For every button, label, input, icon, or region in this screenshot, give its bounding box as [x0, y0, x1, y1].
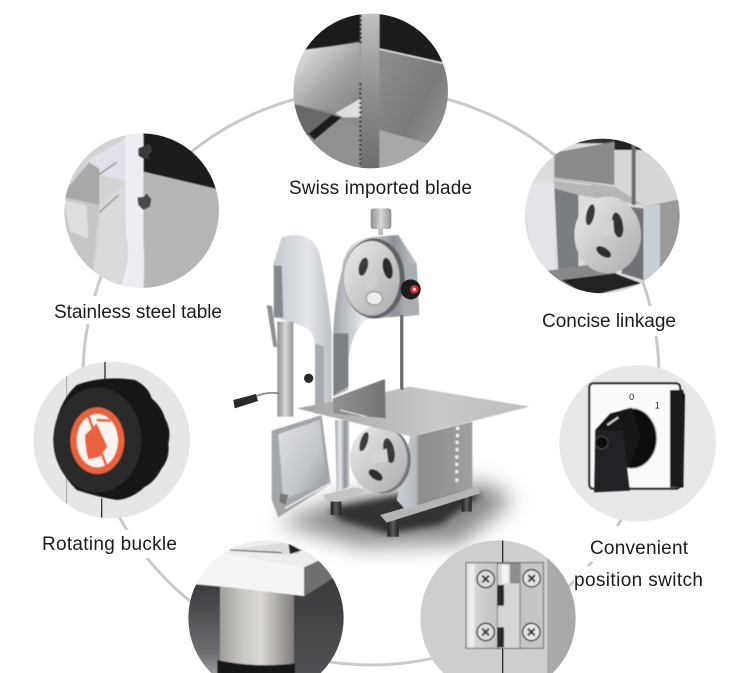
crank handle: [233, 374, 313, 408]
switch marks: 1: [655, 401, 660, 411]
switch marks: [630, 394, 660, 408]
floor shadow: [277, 483, 513, 547]
lower wheel: [350, 426, 411, 493]
lower door: [272, 415, 331, 517]
label: Convenient position switch: [574, 538, 703, 591]
label: Rotating buckle: Rotating buckle: [42, 534, 177, 555]
detail: Convenient position switch: [557, 363, 720, 527]
switch plate: [680, 388, 686, 488]
upper wheel: [343, 238, 405, 318]
label: Convenient position switch: Convenient: [590, 538, 689, 559]
label: Stainless steel table: Stainless steel table: [54, 302, 222, 323]
main column: [333, 235, 419, 492]
detail: foot: [187, 537, 347, 673]
label: Swiss imported blade: Swiss imported blade: [289, 178, 472, 199]
connecting ring: [83, 89, 659, 665]
cabinet: [397, 422, 472, 509]
label: Concise linkage: Concise linkage: [542, 311, 676, 332]
detail: Swiss imported blade: [293, 14, 448, 168]
upper door: [267, 235, 332, 417]
table: [297, 379, 529, 437]
detail: Rotating buckle: [30, 358, 193, 522]
tension knob: [401, 279, 421, 299]
dial: [622, 408, 658, 470]
blade over table: [401, 315, 403, 390]
detail: hinge: [418, 538, 578, 673]
switch marks: 0: [629, 392, 634, 402]
base rails: [323, 487, 480, 537]
saw blade: [400, 315, 403, 412]
top adjuster: [371, 208, 391, 235]
detail: Stainless steel table: [64, 134, 219, 288]
machine: bone saw: [233, 208, 529, 547]
label: Convenient position switch: position switch: [574, 570, 703, 591]
detail: Concise linkage: [522, 137, 685, 297]
